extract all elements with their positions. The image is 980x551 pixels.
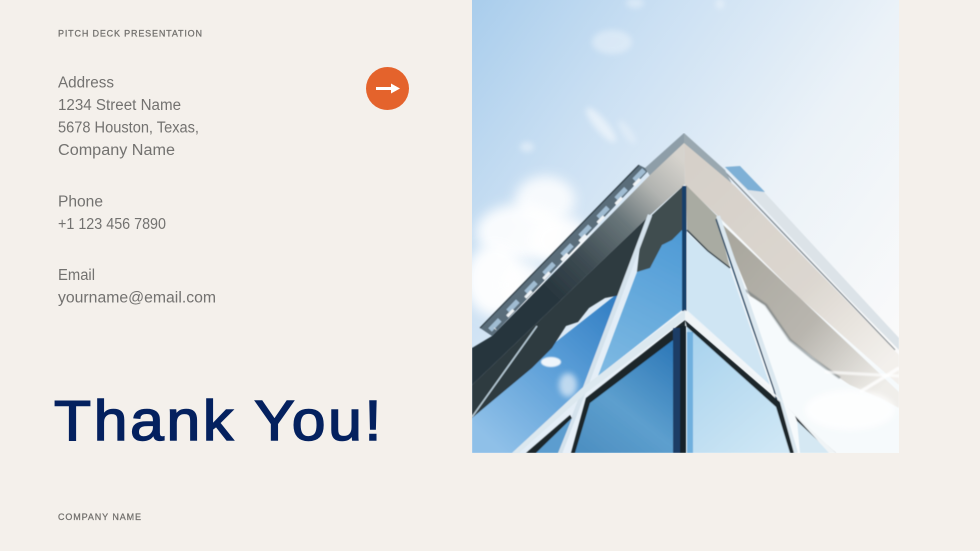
right outer glass bbox=[722, 222, 798, 422]
upper-centre-right glass bbox=[687, 233, 770, 385]
lower-right blue band bbox=[687, 332, 693, 453]
awning highlight line bbox=[472, 326, 537, 417]
text block: address: Company Name bbox=[58, 142, 175, 159]
lower-left glass bbox=[574, 340, 674, 453]
text block: phone: Phone bbox=[58, 194, 103, 210]
right centre panel bbox=[686, 185, 730, 268]
left eave box bbox=[480, 165, 649, 336]
text block: phone: +1 123 456 7890 bbox=[58, 216, 166, 233]
frame shadows bbox=[526, 320, 836, 453]
text block: address: 1234 Street Name bbox=[58, 97, 181, 114]
title: thank you: Thank You! bbox=[54, 389, 384, 453]
central column upper bbox=[682, 186, 686, 311]
text block: address bbox=[58, 74, 199, 159]
lens rays bottom right bbox=[825, 368, 899, 392]
right panel edge bbox=[687, 230, 730, 268]
lower-right glass bbox=[687, 327, 792, 453]
text block: phone bbox=[58, 194, 166, 233]
left mullion bbox=[560, 215, 650, 453]
sky bbox=[472, 0, 899, 453]
icon: orange arrow button bbox=[366, 67, 409, 110]
text block: email: Email bbox=[58, 267, 95, 284]
transom bars bbox=[512, 310, 685, 453]
right mullion dark line bbox=[715, 218, 778, 400]
clouds bbox=[465, 0, 724, 316]
central column lower bbox=[672, 328, 681, 453]
right grey awning bbox=[719, 221, 899, 408]
cloud reflection bbox=[541, 357, 577, 397]
reflected cloud bottom right bbox=[867, 391, 891, 403]
building bbox=[472, 133, 899, 453]
right eave glass bbox=[742, 185, 899, 350]
right soffit bbox=[684, 143, 899, 385]
dark awning left of mullion bbox=[472, 215, 650, 418]
right fascia bbox=[684, 133, 732, 183]
left soffit bbox=[472, 143, 685, 385]
right awning shadow bbox=[745, 290, 840, 378]
lower-left corner glass bbox=[535, 418, 572, 453]
photo: glass building against sky bbox=[465, 0, 899, 453]
left eave fins bbox=[480, 165, 644, 330]
text block: email bbox=[58, 267, 216, 306]
right mullion bbox=[718, 216, 796, 453]
eyebrow: pitch deck presentation: PITCH DECK PRESENTATION bbox=[58, 28, 202, 38]
left outer glass bbox=[472, 290, 622, 453]
footer: company name: COMPANY NAME bbox=[58, 512, 141, 522]
upper-centre glass bbox=[598, 230, 682, 376]
dark awning right of mullion bbox=[637, 187, 682, 272]
lower-right wedge bbox=[797, 420, 830, 453]
text block: address: 5678 Houston, Texas, bbox=[58, 120, 199, 136]
text block: email: yourname@email.com bbox=[58, 290, 216, 306]
text block: address: Address bbox=[58, 74, 114, 92]
left fascia bbox=[645, 133, 684, 176]
